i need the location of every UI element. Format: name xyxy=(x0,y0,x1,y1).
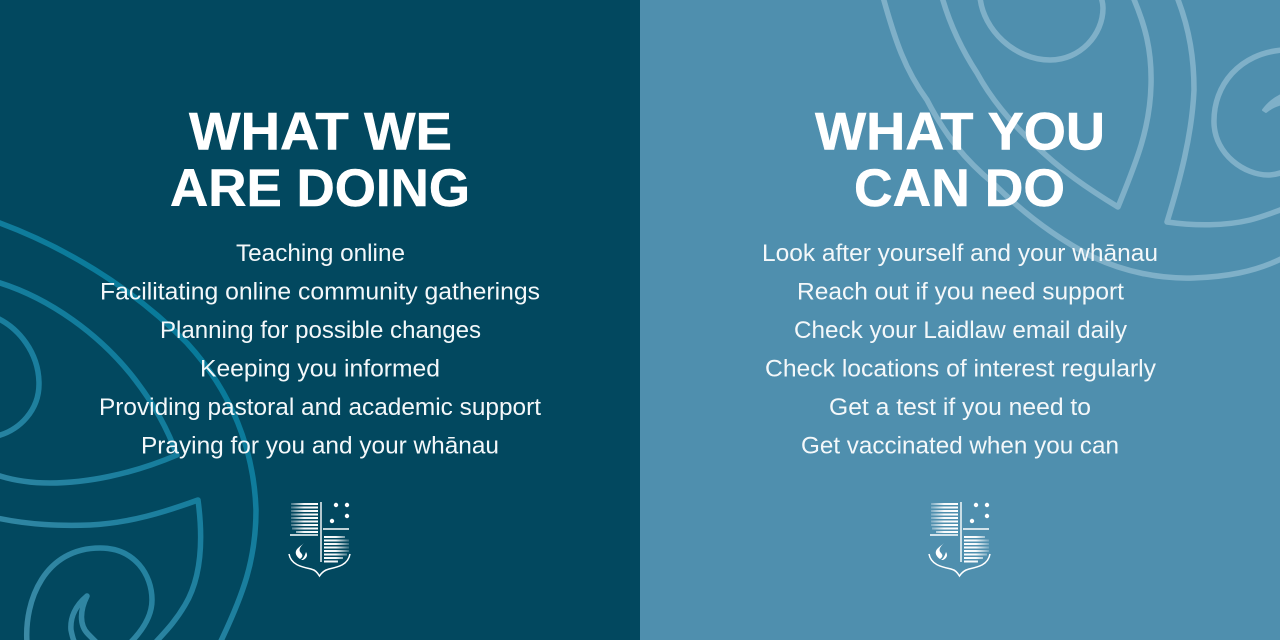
panel background: mid blue xyxy=(640,0,1280,640)
list: what we are doing: Praying for you and your whānau xyxy=(141,432,499,460)
list: what we are doing: Keeping you informed xyxy=(200,356,440,382)
panel: what you can do xyxy=(640,0,1280,640)
list: what we are doing: Planning for possible changes xyxy=(160,317,481,344)
heading: what we are doing: ARE DOING xyxy=(170,159,470,218)
list: what we are doing: Teaching online xyxy=(236,240,405,267)
list: what you can do: Reach out if you need support xyxy=(797,278,1124,306)
icon: koru hook tip xyxy=(1263,94,1280,112)
list: what you can do xyxy=(762,240,1158,460)
list: what we are doing: Facilitating online community gatherings xyxy=(100,278,540,306)
icon: crest logo xyxy=(289,502,350,576)
list: what you can do: Get vaccinated when you can xyxy=(801,432,1119,460)
list: what you can do: Check locations of interest regularly xyxy=(765,356,1156,382)
list: what you can do: Get a test if you need to xyxy=(829,394,1091,421)
heading: what we are doing: WHAT WE xyxy=(189,102,452,162)
heading: what you can do: CAN DO xyxy=(854,159,1065,218)
list: what you can do: Look after yourself and your whānau xyxy=(762,240,1158,267)
heading: what you can do: WHAT YOU xyxy=(815,102,1105,162)
list: what we are doing xyxy=(99,240,541,460)
list: what we are doing: Providing pastoral and academic support xyxy=(99,394,541,421)
heading: what you can do xyxy=(815,102,1105,218)
panel: what we are doing xyxy=(0,0,640,640)
decorative koru swirl: right panel xyxy=(883,0,1280,278)
heading: what we are doing xyxy=(170,102,470,218)
decorative koru swirl: left panel xyxy=(0,222,256,640)
list: what you can do: Check your Laidlaw email daily xyxy=(794,317,1127,344)
icon: crest logo xyxy=(929,502,990,576)
panel background: dark teal xyxy=(0,0,640,640)
